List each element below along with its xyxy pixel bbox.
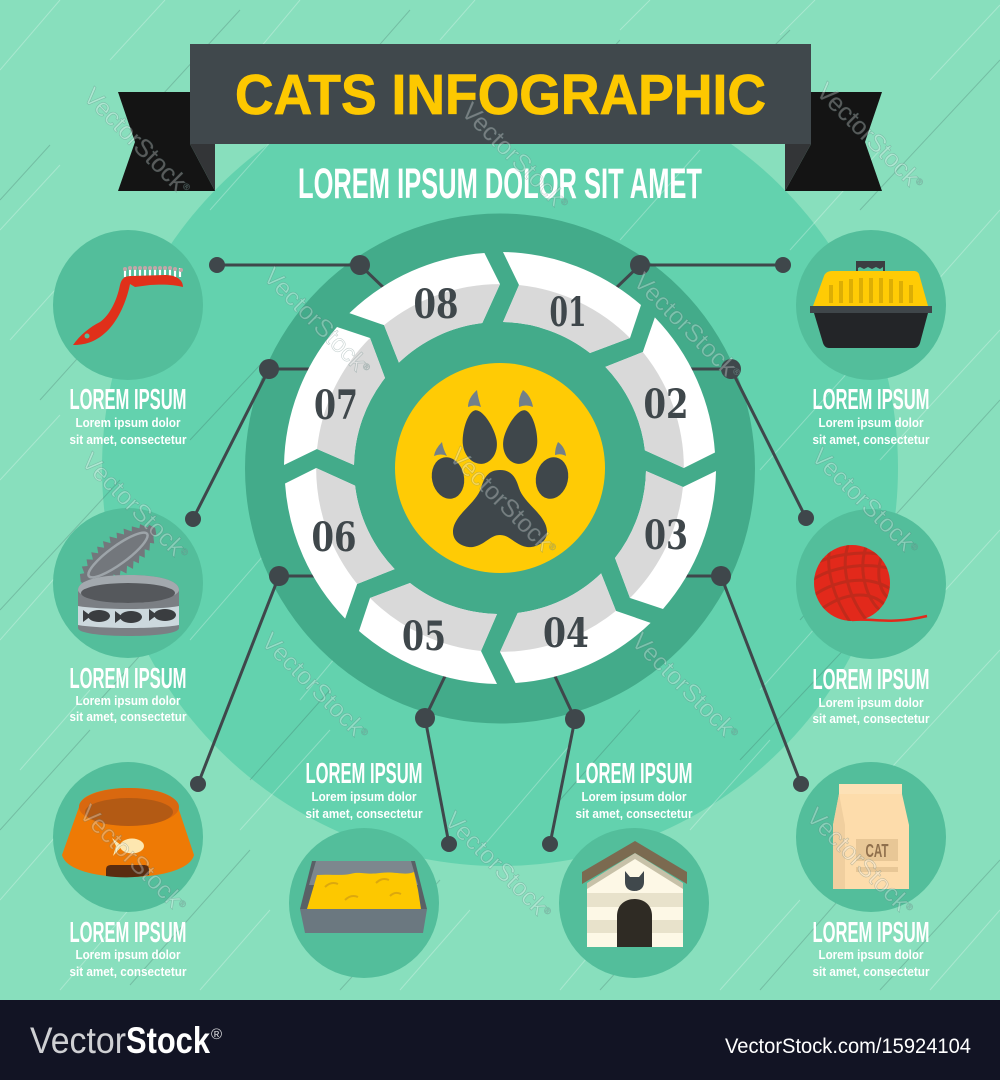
center yellow disc [395,363,605,573]
icon circle: food bowl [53,762,203,912]
watermarks: VectorStock [74,799,188,914]
watermarks: ® [547,541,559,553]
label: middle left [70,663,187,724]
watermarks: ® [542,905,554,917]
segment 08: 08 [414,281,458,328]
icon circle: yarn ball [796,509,946,659]
label: top right [812,384,930,447]
icon circle: litter box [289,828,439,978]
label: bottom left: Lorem ipsum dolor [76,948,181,962]
segment 03: 03 [644,512,688,559]
footer logo: Stock [126,1020,210,1061]
label: middle right [812,664,930,726]
watermarks: VectorStock [628,267,742,382]
watermarks: VectorStock [626,627,740,742]
watermarks: VectorStock [811,77,925,192]
label: bottom center left: LOREM IPSUM [306,758,422,790]
watermarks: VectorStock [76,447,190,562]
watermarks: ® [731,366,743,378]
label: top right: Lorem ipsum dolor [818,416,924,430]
label: bottom center right: sit amet, consectetur [576,807,693,821]
label: middle left: sit amet, consectetur [70,710,187,724]
label: bottom right: sit amet, consectetur [812,965,930,979]
watermarks: ® [909,541,921,553]
segment 07 [284,327,385,465]
footer logo [30,1020,222,1061]
watermarks: ® [177,898,189,910]
watermarks: VectorStock [456,97,570,212]
label: bottom center right [576,758,693,821]
label: bottom left [70,917,187,979]
segment 02 [583,317,752,486]
icon circle: cat house [559,828,709,978]
wheel outer ring [245,214,755,724]
connector: left 07 [185,359,315,527]
segment 04 [482,551,651,720]
connector: top right [614,255,791,290]
segment 05 [359,583,497,684]
watermarks: VectorStock [258,262,372,377]
central wheel [248,216,752,720]
label: top left [70,384,187,447]
label: bottom right: Lorem ipsum dolor [818,948,924,962]
label: bottom center right: LOREM IPSUM [576,758,692,790]
watermarks: ® [179,546,191,558]
title ribbon [118,44,882,191]
connector: left 06 [190,566,320,792]
footer bar [0,1000,1000,1080]
label: middle right: Lorem ipsum dolor [818,696,924,710]
segment 01: 01 [550,289,586,336]
watermarks: ® [361,361,373,373]
segment 06 [248,450,417,619]
connector: bottom 05 [415,672,457,852]
icon circle: tin can [53,508,203,658]
label: middle right: sit amet, consectetur [812,712,930,726]
footer logo: ® [211,1026,222,1043]
watermarks: ® [181,181,193,193]
watermarks: VectorStock [78,82,192,197]
icon circle: brush [53,230,203,380]
label: bottom center left: Lorem ipsum dolor [312,790,417,804]
icon: paw print [428,390,572,547]
label: bottom right [812,917,930,979]
watermarks: VectorStock [439,806,553,921]
watermarks: VectorStock [256,627,370,742]
segment 03 [615,471,716,609]
label: top left: LOREM IPSUM [70,384,186,416]
label: top right: sit amet, consectetur [812,433,930,447]
footer logo: Vector [30,1020,126,1061]
icon circle: pet carrier [796,230,946,380]
connector: bottom 04 [542,672,585,852]
segment 02: 02 [644,381,688,428]
label: bottom center left [306,758,423,821]
segment 08 [349,216,518,385]
segment 06: 06 [312,514,356,561]
label: bottom left: LOREM IPSUM [70,917,186,949]
segment 01 [503,252,641,353]
segment 07: 07 [314,382,358,429]
footer image id: VectorStock.com/15924104 [725,1034,971,1058]
connector: top left [209,255,386,290]
watermarks: VectorStock [801,802,915,917]
watermarks: ® [729,726,741,738]
watermarks [74,77,930,926]
connector: right 02 [685,359,814,526]
label: middle left: LOREM IPSUM [70,663,186,695]
label: top left: sit amet, consectetur [70,433,187,447]
watermarks: ® [559,196,571,208]
large background circle [102,70,898,866]
segment 04: 04 [543,610,589,657]
watermarks: VectorStock [806,442,920,557]
title: CATS INFOGRAPHIC [235,63,766,127]
icon circle: food bag: CAT [866,841,888,861]
label: bottom center left: sit amet, consectetur [306,807,423,821]
label: bottom center right: Lorem ipsum dolor [582,790,687,804]
icon circle: food bag [796,762,946,912]
label: middle left: Lorem ipsum dolor [76,694,181,708]
segment 05: 05 [402,613,446,660]
connector: right 03 [680,566,809,792]
watermarks: ® [904,901,916,913]
label: top left: Lorem ipsum dolor [76,416,181,430]
watermarks: VectorStock [444,442,558,557]
label: bottom left: sit amet, consectetur [70,965,187,979]
watermarks: ® [359,726,371,738]
watermarks: ® [914,176,926,188]
subtitle: LOREM IPSUM DOLOR SIT AMET [298,160,702,208]
